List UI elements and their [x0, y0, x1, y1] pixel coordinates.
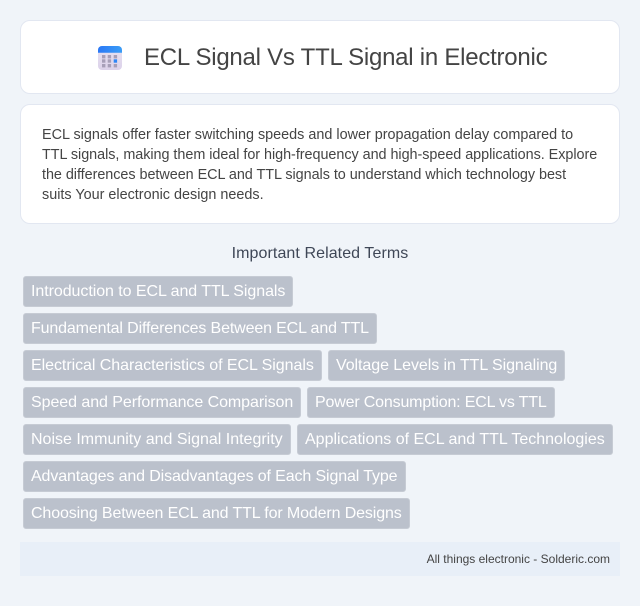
- tag: [328, 350, 565, 381]
- tag: [23, 498, 410, 529]
- tag: Speed and Performance Comparison: [31, 394, 293, 411]
- tag: [307, 387, 555, 418]
- intro text: suits Your electronic design needs.: [42, 187, 264, 203]
- intro text: ECL signals offer faster switching speeds and lower propagation delay compared to: [42, 127, 573, 143]
- tag: Advantages and Disadvantages of Each Signal Type: [31, 468, 397, 485]
- intro text: TTL signals, making them ideal for high-frequency and high-speed applications. Explore: [42, 147, 597, 163]
- tag list: [23, 276, 613, 529]
- tag: [23, 276, 293, 307]
- icon: calendar: [98, 46, 122, 70]
- tag: Voltage Levels in TTL Signaling: [336, 357, 557, 374]
- tag: Introduction to ECL and TTL Signals: [31, 283, 285, 300]
- footer: All things electronic - Solderic.com: [427, 552, 610, 566]
- tag: Applications of ECL and TTL Technologies: [305, 431, 605, 448]
- tag: Noise Immunity and Signal Integrity: [31, 431, 283, 448]
- tag: Power Consumption: ECL vs TTL: [315, 394, 547, 411]
- footer: [20, 542, 620, 576]
- intro panel: [20, 104, 620, 224]
- tag: Choosing Between ECL and TTL for Modern Designs: [31, 505, 402, 522]
- intro text: the differences between ECL and TTL signals to understand which technology best: [42, 167, 566, 183]
- tag: [297, 424, 613, 455]
- tag: [23, 461, 406, 492]
- tag: [23, 387, 301, 418]
- header panel: [20, 20, 620, 94]
- tag: [23, 350, 322, 381]
- tag: Fundamental Differences Between ECL and TTL: [31, 320, 369, 337]
- tag: Electrical Characteristics of ECL Signals: [31, 357, 314, 374]
- section heading: Important Related Terms: [232, 245, 408, 262]
- title: ECL Signal Vs TTL Signal in Electronic: [144, 44, 547, 71]
- intro text: [42, 127, 597, 203]
- tag: [23, 313, 377, 344]
- tag: [23, 424, 291, 455]
